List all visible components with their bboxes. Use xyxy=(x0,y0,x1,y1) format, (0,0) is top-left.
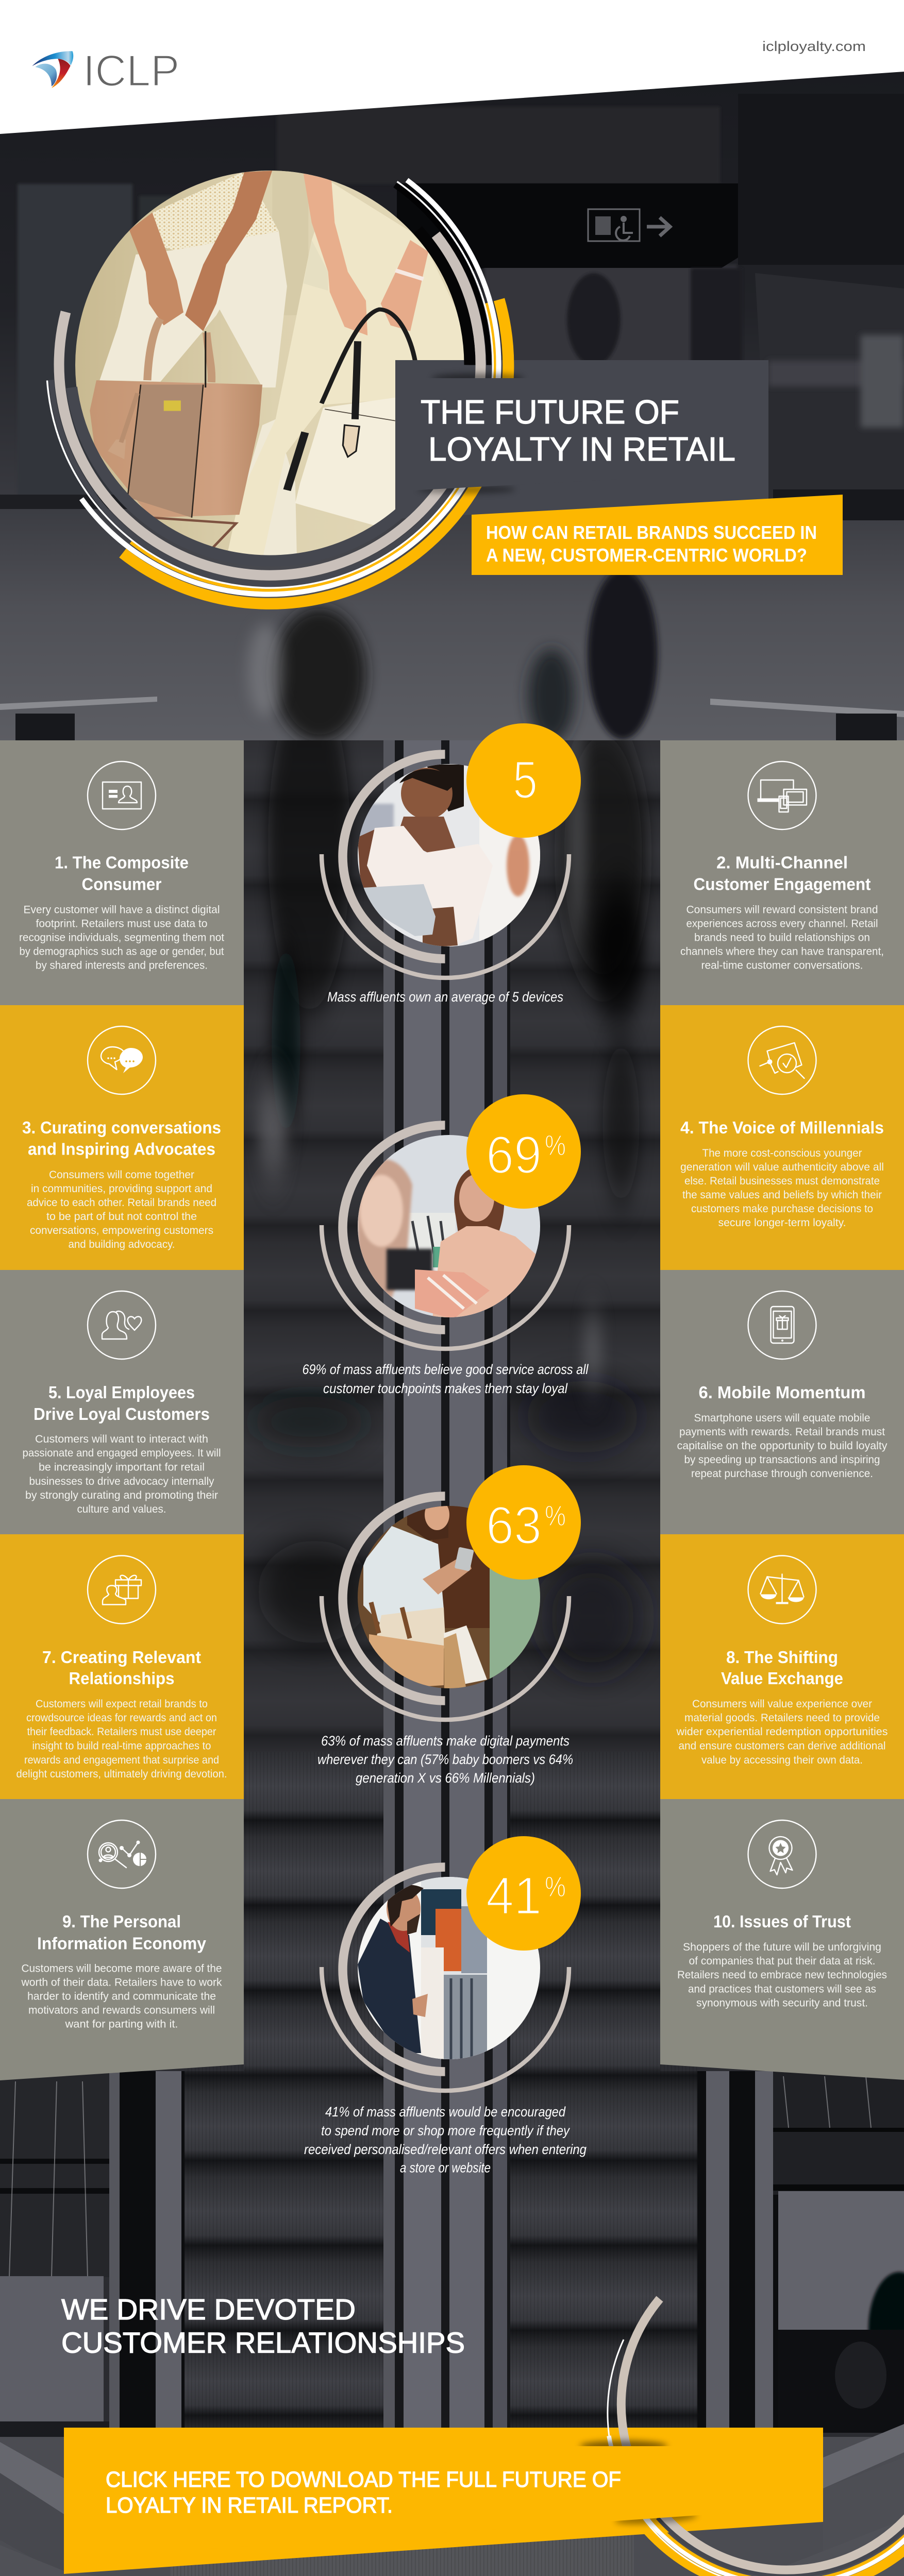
website url: iclployalty.com xyxy=(762,39,866,54)
icon: person and gift xyxy=(88,1556,156,1624)
body text: brands need to build relationships on xyxy=(694,931,870,944)
body text xyxy=(23,1433,221,1515)
body text: the same values and beliefs by which their xyxy=(682,1189,882,1201)
rings xyxy=(322,1125,569,1349)
body text: payments with rewards. Retail brands must xyxy=(679,1426,885,1438)
heading: 9. The Personal xyxy=(62,1912,181,1931)
CTA concentric rings xyxy=(608,2299,904,2576)
motion blur xyxy=(253,680,647,1674)
photo: shop assistant and customer xyxy=(356,1133,541,1319)
body text xyxy=(677,1412,888,1480)
body text xyxy=(16,1698,227,1780)
heading xyxy=(22,1118,221,1158)
body text: material goods. Retailers need to provide xyxy=(684,1712,880,1724)
body text: of companies that put their data at risk. xyxy=(689,1955,875,1967)
heading: Drive Loyal Customers xyxy=(34,1404,210,1423)
yellow stat circle xyxy=(466,1465,581,1580)
body text: to be part of but not control the xyxy=(46,1211,197,1223)
heading: 1. The Composite xyxy=(55,853,189,872)
body text: value by accessing their own data. xyxy=(701,1754,863,1766)
caption: customer touchpoints makes them stay loyal xyxy=(323,1381,568,1396)
body text: channels where they can have transparent, xyxy=(680,946,884,957)
body text: and practices that customers will see as xyxy=(688,1984,876,1995)
body text: be increasingly important for retail xyxy=(39,1461,205,1473)
caption: 41% of mass affluents would be encouraged xyxy=(325,2104,566,2120)
yellow stat circle: 69 xyxy=(486,1125,542,1184)
photo: woman with tablet xyxy=(356,762,541,948)
CTA fold shadows xyxy=(580,2441,698,2527)
hero group xyxy=(47,165,843,604)
caption: wherever they can (57% baby boomers vs 64% xyxy=(317,1752,573,1767)
yellow stat circle xyxy=(466,1094,581,1209)
caption: 69% of mass affluents believe good service across all xyxy=(302,1362,589,1377)
body text: repeat purchase through convenience. xyxy=(691,1468,873,1480)
body text: experiences across every channel. Retail xyxy=(687,918,878,929)
hero photo: two women with handbags xyxy=(75,171,464,555)
body text: Customers will expect retail brands to xyxy=(36,1698,208,1710)
yellow stat circle: 5 xyxy=(513,750,538,809)
CTA text: CLICK HERE TO DOWNLOAD THE FULL FUTURE OF xyxy=(106,2467,621,2492)
yellow stat circle: 41 xyxy=(486,1866,542,1925)
body text: by demographics such as age or gender, but xyxy=(20,946,224,957)
body text: footprint. Retailers must use data to xyxy=(36,918,208,929)
body text: Consumers will value experience over xyxy=(692,1698,872,1710)
heading xyxy=(37,1912,207,1953)
body text: want for parting with it. xyxy=(64,2019,178,2030)
body text: The more cost-conscious younger xyxy=(702,1147,862,1159)
caption: received personalised/relevant offers when entering xyxy=(304,2142,587,2157)
caption: to spend more or shop more frequently if they xyxy=(321,2123,570,2138)
body text: Shoppers of the future will be unforgiving xyxy=(683,1941,881,1953)
heading: 3. Curating conversations xyxy=(22,1118,221,1137)
body text xyxy=(21,1963,222,2030)
body text xyxy=(680,1147,884,1229)
CTA front fold xyxy=(64,2446,823,2558)
body text: and building advocacy. xyxy=(68,1239,175,1250)
panel: 6 Mobile Momentum xyxy=(660,1270,904,1534)
heading: 10. Issues of Trust xyxy=(713,1912,851,1931)
body text: real-time customer conversations. xyxy=(701,959,863,972)
photo: woman with phone and shopping bags xyxy=(356,1499,541,1690)
caption xyxy=(317,1733,573,1786)
heading: 7. Creating Relevant xyxy=(42,1648,201,1667)
yellow stat circle: % xyxy=(545,1129,566,1161)
caption xyxy=(302,1362,589,1396)
title box front fold xyxy=(395,378,768,492)
CTA banner xyxy=(64,2428,823,2574)
body text: passionate and engaged employees. It will xyxy=(23,1447,221,1459)
heading: Consumer xyxy=(81,875,162,893)
subtitle banner: HOW CAN RETAIL BRANDS SUCCEED IN xyxy=(486,522,817,543)
subtitle banner xyxy=(472,495,843,575)
body text: Retailers need to embrace new technologies xyxy=(677,1969,887,1981)
escalators xyxy=(244,740,660,2441)
yellow stat circle xyxy=(466,1836,581,1951)
icon: devices xyxy=(748,761,816,829)
heading: 4. The Voice of Millennials xyxy=(680,1118,884,1137)
body text: else. Retail businesses must demonstrate xyxy=(684,1175,880,1187)
icon: balance scales xyxy=(748,1556,816,1624)
body text: capitalise on the opportunity to build loyalty xyxy=(677,1440,888,1452)
yellow stat circle xyxy=(466,723,581,838)
body text: recognise individuals, segmenting them not xyxy=(19,931,224,944)
rings xyxy=(322,754,569,978)
body text: and ensure customers can derive additional xyxy=(678,1740,885,1752)
body text xyxy=(680,904,884,972)
title: THE FUTURE OF xyxy=(421,393,679,431)
closing heading: WE DRIVE DEVOTED xyxy=(61,2293,356,2326)
caption xyxy=(304,2104,587,2175)
subtitle banner: A NEW, CUSTOMER-CENTRIC WORLD? xyxy=(486,545,807,566)
title xyxy=(421,393,735,468)
heading: Value Exchange xyxy=(721,1669,843,1688)
body text: customers make purchase decisions to xyxy=(691,1203,873,1215)
panel: 1 The Composite Consumer xyxy=(0,740,244,1005)
body text xyxy=(27,1169,216,1250)
body text: conversations, empowering customers xyxy=(30,1225,213,1236)
body text: motivators and rewards consumers will xyxy=(28,2004,215,2016)
title box xyxy=(395,360,768,519)
body text: by strongly curating and promoting their xyxy=(25,1489,218,1501)
icon: people and heart xyxy=(88,1291,156,1359)
caption: a store or website xyxy=(400,2160,491,2175)
yellow stat circle: % xyxy=(545,1870,566,1903)
heading: 5. Loyal Employees xyxy=(48,1383,195,1402)
body text: wider experiential redemption opportunities xyxy=(676,1726,888,1738)
yellow stat circle: % xyxy=(545,1499,566,1532)
heading: 6. Mobile Momentum xyxy=(699,1383,866,1402)
lower floor and balustrades xyxy=(0,2437,904,2576)
body text: worth of their data. Retailers have to work xyxy=(21,1976,222,1989)
stat: 63% digital payments xyxy=(317,1465,581,1786)
heading: Relationships xyxy=(69,1669,174,1688)
CTA text xyxy=(106,2467,621,2518)
heading: 8. The Shifting xyxy=(726,1648,838,1667)
body text: by shared interests and preferences. xyxy=(36,959,208,972)
body text: insight to build real-time approaches to xyxy=(32,1740,211,1752)
heading xyxy=(34,1383,210,1423)
hero concentric rings xyxy=(47,180,508,604)
panel: 4 The Voice of Millennials xyxy=(660,1005,904,1270)
body text: Every customer will have a distinct digital xyxy=(24,904,220,916)
panel: 2 Multi-Channel Customer Engagement xyxy=(660,740,904,1005)
stat: 69% good service xyxy=(302,1094,589,1396)
icon: review magnifier xyxy=(748,1026,816,1094)
panel: 3 Curating conversations xyxy=(0,1005,244,1270)
stat: 5 devices xyxy=(322,723,581,1005)
rings xyxy=(322,1867,569,2091)
body text: Customers will want to interact with xyxy=(35,1433,208,1445)
yellow stat circle: 63 xyxy=(486,1496,542,1555)
heading xyxy=(55,853,189,893)
heading xyxy=(694,853,871,893)
panel: 8 The Shifting Value Exchange xyxy=(660,1534,904,1799)
body text: rewards and engagement that surprise and xyxy=(24,1754,219,1766)
panel: 7 Creating Relevant Relationships xyxy=(0,1534,244,1799)
panel: 10 Issues of Trust xyxy=(660,1799,904,2080)
heading: Information Economy xyxy=(37,1934,207,1953)
icon: data magnifier xyxy=(88,1820,156,1888)
logo: ICLP header: ICLP xyxy=(83,47,179,96)
body text: culture and values. xyxy=(77,1503,166,1515)
body text xyxy=(19,904,224,972)
body text: Consumers will come together xyxy=(49,1169,194,1181)
title: LOYALTY IN RETAIL xyxy=(428,430,735,468)
body text: generation will value authenticity above all xyxy=(680,1161,884,1173)
body text: in communities, providing support and xyxy=(31,1183,212,1195)
heading: 2. Multi-Channel xyxy=(716,853,848,872)
body text: Customers will become more aware of the xyxy=(22,1963,222,1974)
body text: secure longer-term loyalty. xyxy=(718,1217,846,1229)
heading xyxy=(42,1648,201,1688)
closing heading xyxy=(61,2293,465,2360)
CTA text: LOYALTY IN RETAIL REPORT. xyxy=(106,2493,393,2518)
body text: Smartphone users will equate mobile xyxy=(694,1412,870,1424)
heading: and Inspiring Advocates xyxy=(28,1140,215,1158)
call to action group xyxy=(64,2299,904,2576)
stat: 41% personalised offers xyxy=(304,1836,587,2175)
body text: their feedback. Retailers must use deeper xyxy=(27,1726,216,1738)
body text: harder to identify and communicate the xyxy=(27,1991,216,2002)
body text: by speeding up transactions and inspiring xyxy=(684,1454,880,1466)
rings xyxy=(322,1496,569,1720)
panel: 5 Loyal Employees xyxy=(0,1270,244,1534)
body text: delight customers, ultimately driving devotion. xyxy=(16,1768,227,1780)
body text xyxy=(676,1698,888,1766)
caption: 63% of mass affluents make digital payments xyxy=(321,1733,570,1749)
panel: 9 The Personal Information Economy xyxy=(0,1799,244,2080)
body text: advice to each other. Retail brands need xyxy=(27,1197,216,1209)
top white header band xyxy=(0,0,904,134)
icon: award rosette xyxy=(748,1820,816,1888)
caption: generation X vs 66% Millennials) xyxy=(356,1770,535,1786)
heading: Customer Engagement xyxy=(694,875,871,893)
icon: speech bubbles xyxy=(88,1026,156,1094)
body text: businesses to drive advocacy internally xyxy=(29,1476,214,1487)
caption: Mass affluents own an average of 5 devices xyxy=(327,989,563,1005)
photo: man browsing clothes rack xyxy=(356,1875,541,2062)
icon: identity card xyxy=(88,761,156,829)
icon: smartphone with gift xyxy=(748,1291,816,1359)
body text: crowdsource ideas for rewards and act on xyxy=(26,1712,217,1724)
heading xyxy=(721,1648,843,1688)
body text: synonymous with security and trust. xyxy=(696,1997,868,2009)
logo: ICLP header xyxy=(32,47,179,96)
body text: Consumers will reward consistent brand xyxy=(687,904,878,916)
body text xyxy=(677,1941,887,2009)
closing heading: CUSTOMER RELATIONSHIPS xyxy=(61,2327,465,2360)
title box fold shadows xyxy=(417,374,524,494)
